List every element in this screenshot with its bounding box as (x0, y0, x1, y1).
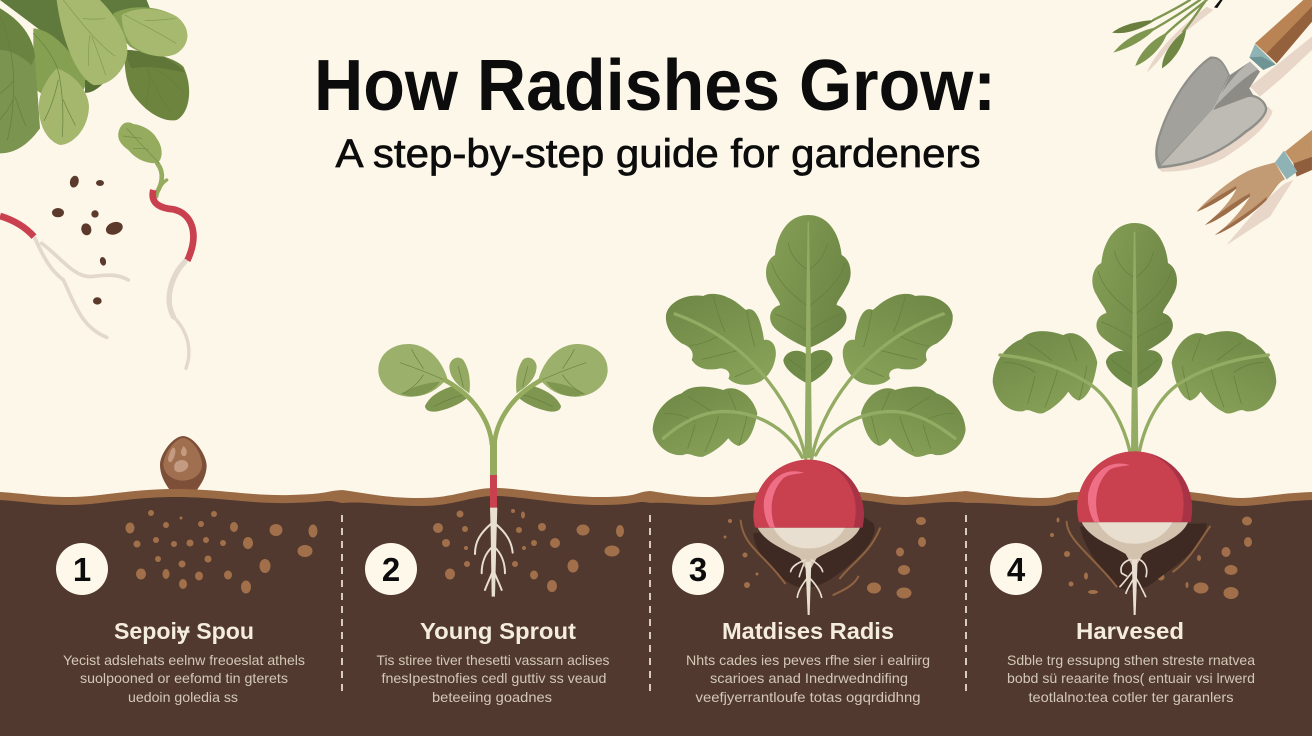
number badge 2: 2 (382, 551, 400, 588)
dashed dividers (342, 515, 966, 694)
radish root (753, 460, 864, 573)
soil band (0, 488, 1312, 736)
description: step 2: beteeiing goadnes (432, 689, 552, 705)
step 1 soil particles (126, 510, 318, 594)
title: How Radishes Grow: (314, 46, 996, 126)
roots (475, 508, 513, 597)
number badge 2 (365, 543, 417, 595)
illustration: foliage top-left (0, 0, 189, 153)
description: step 4: Sdble trg essupng sthen streste rnatvea (1007, 652, 1255, 668)
number badge 3 (672, 543, 724, 595)
description: step 1: Yecist adslehats eelnw freoeslat athels (63, 652, 305, 668)
icon: hand fork (1197, 130, 1312, 245)
icon: loose seeds (52, 175, 125, 305)
description: step 3: scarioes anad Inedrwedndifing (710, 670, 908, 686)
leaves (993, 223, 1276, 413)
icon: rosemary sprig (1112, 0, 1223, 73)
icon: trowel (1155, 0, 1312, 172)
taproot (791, 560, 823, 615)
illustration: seedlings and loose seeds (0, 122, 193, 368)
soil hollow (1067, 522, 1210, 590)
heading: step 4: Harvesed (1076, 618, 1184, 644)
number badge 4: 4 (1007, 551, 1026, 588)
number badge 3: 3 (689, 551, 707, 588)
illustration: garden tools (1112, 0, 1312, 245)
soil hollow (741, 517, 880, 595)
subtitle: A step-by-step guide for gardeners (336, 132, 980, 176)
icon: left root (0, 216, 128, 337)
right leaves (516, 344, 608, 412)
number badge 4 (990, 543, 1042, 595)
panel: step 1 (56, 543, 305, 705)
number badge 1: 1 (73, 551, 91, 588)
step 2 soil particles (433, 509, 624, 592)
stems (1000, 232, 1268, 453)
description: step 2: Tis stiree tiver thesetti vassarn aclises (376, 652, 610, 668)
heading: step 2: Young Sprout (420, 618, 576, 644)
panel: step 3 (672, 543, 930, 705)
icon: radish seed on soil (160, 436, 207, 494)
stem (443, 379, 543, 508)
icon: curly seedling (118, 122, 193, 368)
illustration: harvest radish (993, 223, 1276, 615)
heading: step 1: Sepoiɏ Spou (114, 618, 254, 644)
description: step 2: fnesIpestnofies cedl guttiv ss veaud (382, 670, 606, 686)
taproot (1120, 559, 1147, 615)
step 4 soil particles (1050, 516, 1252, 599)
stems (663, 222, 955, 458)
description: step 1: suolpooned or eefomd tin gterets (80, 670, 288, 686)
panel: step 2 (365, 543, 610, 705)
description: step 4: teotlalno:tea cotler ter garanlers (1028, 689, 1234, 705)
illustration: young sprout (378, 344, 608, 597)
step 3 soil particles (724, 517, 926, 598)
left leaves (378, 344, 470, 412)
number badge 1 (56, 543, 108, 595)
description: step 3 (686, 652, 930, 705)
panel: step 4 (990, 543, 1255, 705)
description: step 4: bobd sü reaarite fnos( entuair vsi lrwerd (1007, 670, 1255, 686)
description: step 3: veefjyerrantloufe totas ogqrdidhng (696, 689, 920, 705)
description: step 2 (376, 652, 610, 705)
illustration: maturing radish (653, 215, 966, 615)
description: step 4 (1007, 652, 1255, 705)
description: step 1 (63, 652, 305, 705)
heading: step 3: Matdises Radis (722, 618, 894, 644)
leaves (653, 215, 966, 457)
description: step 3: Nhts cades ies peves rfhe sier i ealriirg (686, 652, 930, 668)
description: step 1: uedoin goledia ss (128, 689, 238, 705)
radish root (1077, 451, 1192, 570)
